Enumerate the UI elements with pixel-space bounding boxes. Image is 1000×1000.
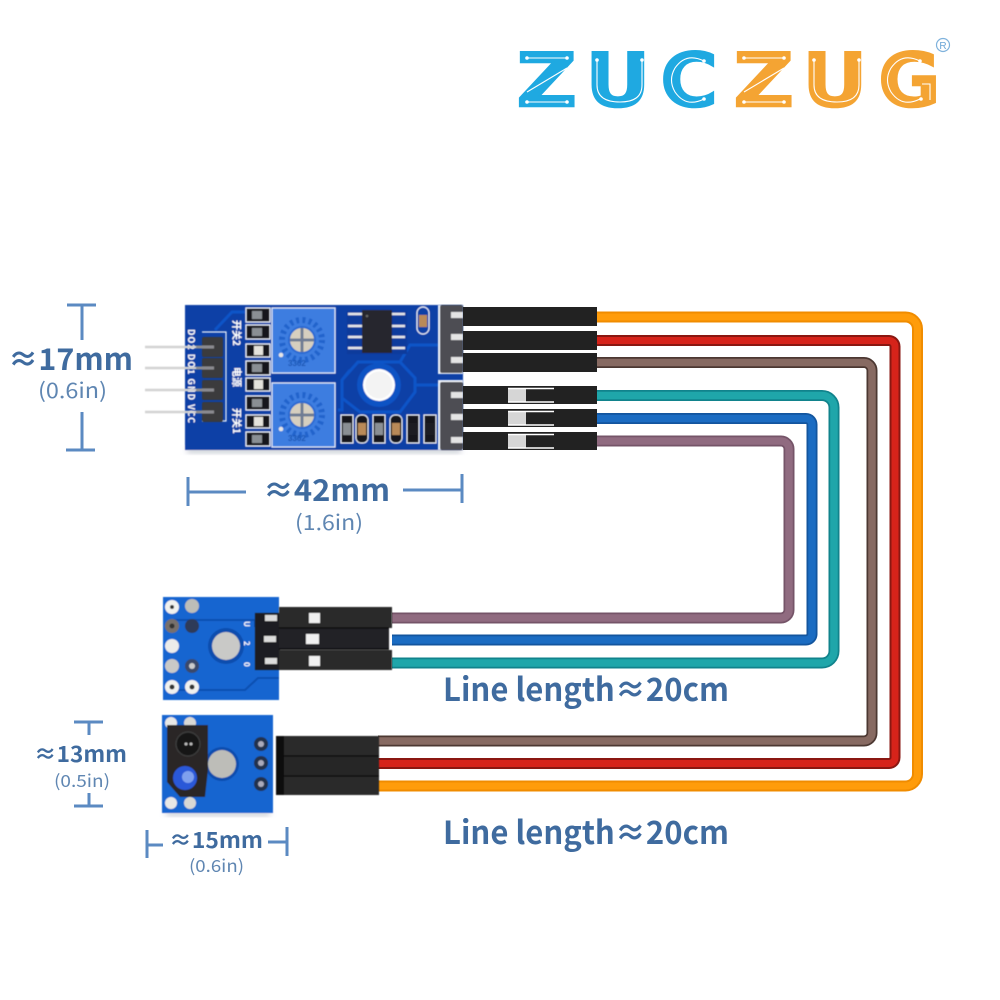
dimension: 13mm: (0.5in) (54, 767, 110, 792)
label: upper line length: Line length≈20cm (443, 665, 729, 711)
right pin headers (438, 305, 463, 450)
silkscreen labels: DO2 DO1 GND VCC (185, 329, 198, 423)
small module: rear connector (255, 607, 392, 670)
small module: rear side (163, 597, 279, 700)
large dual sensor board (185, 305, 463, 453)
wire: red (378, 340, 895, 764)
silkscreen labels: 电源 (230, 367, 245, 387)
logo: ZUCZUG: G (878, 37, 941, 124)
dimension: 17mm: (0.6in) (38, 375, 107, 405)
dimension: 15mm (147, 823, 287, 877)
small module: front connector (276, 736, 379, 795)
comparator IC (347, 310, 407, 354)
solder pads (254, 737, 268, 791)
SMD column (246, 308, 270, 446)
dimension: 13mm: ≈13mm (34, 737, 127, 769)
logo: ZUCZUG: U (802, 38, 868, 125)
dimension: 42mm: ≈42mm (263, 466, 390, 510)
logo: ZUCZUG: R (939, 41, 947, 52)
label: lower line length: Line length≈20cm (443, 808, 729, 854)
small module: rear side: 0 (241, 662, 252, 667)
dimension: 13mm (34, 722, 127, 806)
wire: orange (378, 317, 918, 786)
silkscreen labels: 开关2 (230, 320, 245, 346)
dimension: 42mm: (1.6in) (295, 507, 363, 537)
logo: ZUCZUG: Z (516, 37, 577, 124)
IR sensor housing (167, 725, 208, 797)
small module: rear side: 2 (241, 641, 252, 646)
small module: sensor front (162, 715, 273, 816)
potentiometer top: 3362 (288, 359, 306, 368)
wire: teal (392, 396, 834, 663)
logo: ZUCZUG: U (585, 38, 651, 125)
potentiometer bottom (272, 383, 335, 447)
logo: ZUCZUG: C (660, 38, 718, 125)
logo: ZUCZUG: Z (733, 37, 794, 124)
wire: blue (392, 418, 812, 640)
dimension: 17mm: ≈17mm (8, 335, 133, 379)
potentiometer top (272, 308, 335, 373)
dimension: 17mm (8, 305, 133, 450)
top jumper connectors (463, 307, 597, 450)
small module: rear side: U (241, 621, 252, 627)
potentiometer bottom: 3362 (288, 434, 306, 443)
capacitor top right (417, 307, 429, 334)
wire: brown (378, 362, 872, 741)
dimension: 42mm (188, 466, 462, 537)
dimension: 15mm: ≈15mm (169, 823, 263, 855)
wire: mauve (392, 441, 789, 618)
left four-pin header (145, 332, 226, 422)
logo: ZUCZUG (516, 37, 950, 125)
dimension: 15mm: (0.6in) (189, 852, 244, 877)
silkscreen labels (185, 320, 245, 434)
SMD row (341, 415, 436, 443)
silkscreen labels: 开关1 (230, 408, 245, 434)
